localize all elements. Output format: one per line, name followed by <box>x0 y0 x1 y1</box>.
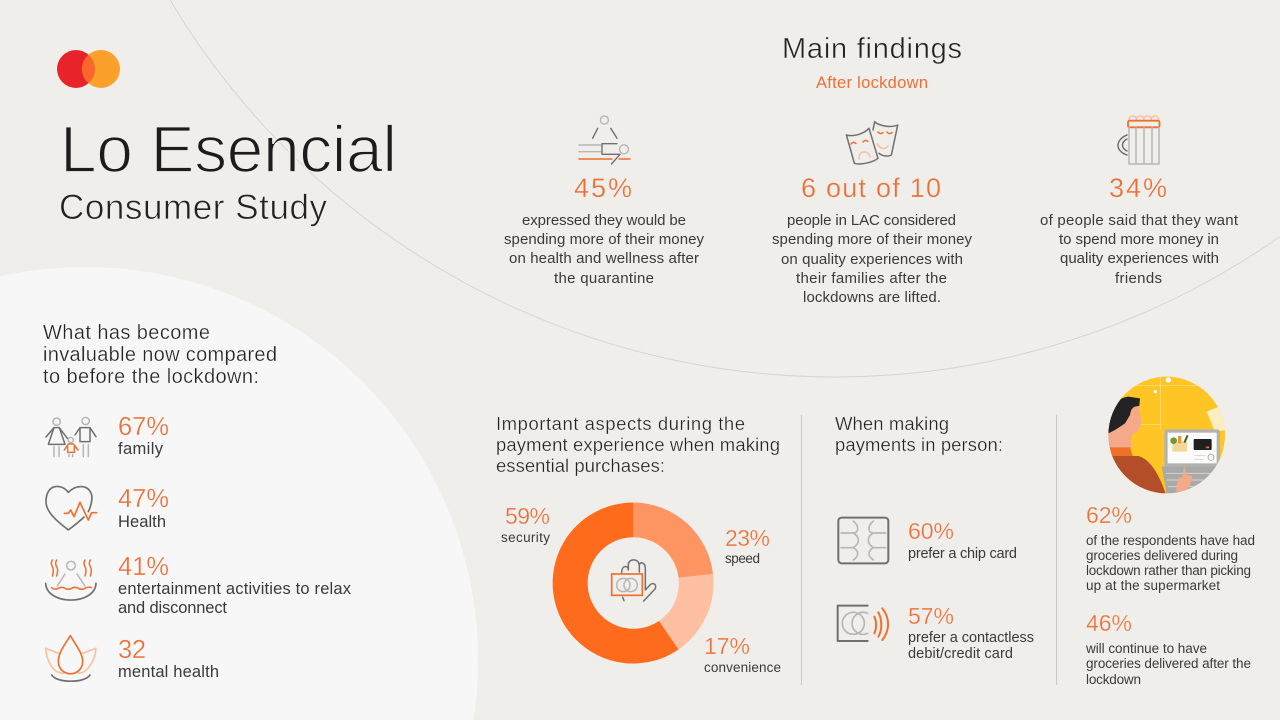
text: friends finding: quality experiences with <box>1060 250 1219 267</box>
label: entertainment: entertainment activities to relax <box>118 580 352 598</box>
heading: payment experience: payment experience when making <box>496 434 780 455</box>
stat: 62% groceries <box>1086 502 1255 593</box>
label: speed <box>725 525 770 566</box>
text: friends finding: to spend more money in <box>1059 231 1219 248</box>
heading: invaluable: What has become <box>43 322 210 344</box>
stat: 62% groceries: 62% <box>1086 502 1132 528</box>
stat: 34%: 34% <box>1109 173 1167 203</box>
panel: main findings heading: Main findings <box>782 33 962 65</box>
heading: payment experience: essential purchases: <box>496 455 665 476</box>
title: Lo Esencial <box>60 112 397 186</box>
text: health finding: the quarantine <box>554 270 654 287</box>
icon: contactless card <box>838 606 888 641</box>
text: health finding: spending more of their money <box>504 231 704 248</box>
icon: chip card <box>838 518 888 563</box>
label: security: security <box>501 530 550 545</box>
panel: finding family experiences <box>772 122 972 306</box>
stat: 46% groceries: will continue to have <box>1085 641 1207 656</box>
stat: 46% groceries <box>1085 610 1251 687</box>
stat: 67%: 67% <box>118 413 169 441</box>
stat: 62% groceries: up at the supermarket <box>1086 578 1220 593</box>
label: family: family <box>118 440 164 458</box>
label: health: Health <box>118 513 166 531</box>
background light circle <box>0 267 478 720</box>
label: security <box>501 503 550 545</box>
heading: payments in person: When making <box>835 413 949 434</box>
icon: person meditating <box>579 116 630 164</box>
label: convenience: 17% <box>704 633 750 659</box>
icon: relaxing in bath <box>46 560 96 600</box>
heading: payment experience <box>496 413 780 476</box>
panel: finding health and wellness <box>504 116 704 287</box>
text: health finding <box>504 212 704 287</box>
stat: chip card: 60% <box>908 518 954 544</box>
stat: 45%: 45% <box>574 173 632 203</box>
stat: 46% groceries: 46% <box>1086 610 1132 636</box>
icon: heart <box>46 486 97 530</box>
heading: payments in person: payments in person: <box>835 434 1003 455</box>
item: health <box>46 485 169 531</box>
label: entertainment: and disconnect <box>118 599 227 617</box>
stat: contactless card <box>908 603 1034 662</box>
label: mental health: mental health <box>118 663 219 681</box>
stat: chip card <box>908 518 1017 562</box>
heading: invaluable <box>43 322 277 388</box>
label: speed: 23% <box>725 525 770 551</box>
text: health finding: on health and wellness after <box>509 250 699 267</box>
stat: 6 out of 10: 6 out of 10 <box>801 173 941 203</box>
logo <box>57 50 120 88</box>
stat: 46% groceries: groceries delivered after the <box>1086 656 1251 671</box>
panel: main findings heading <box>782 33 962 92</box>
title <box>59 112 397 227</box>
donut chart <box>553 502 714 663</box>
panel: what has become invaluable <box>43 322 352 681</box>
stat: contactless card: prefer a contactless <box>908 630 1034 646</box>
panel: groceries delivered <box>1085 373 1255 687</box>
label: entertainment <box>118 580 352 617</box>
icon: hand holding card <box>612 560 656 601</box>
stat: contactless card: 57% <box>908 603 954 629</box>
panel: finding friends experiences <box>1040 116 1239 287</box>
text: family finding: on quality experiences with <box>781 251 963 268</box>
heading: payments in person <box>835 413 1003 455</box>
stat: 32: 32 <box>118 636 146 664</box>
text: family finding: lockdowns are lifted. <box>803 289 941 306</box>
heading: invaluable: to before the lockdown: <box>43 366 259 388</box>
icon: lotus drop <box>46 636 96 681</box>
stat: 62% groceries: groceries delivered during <box>1086 548 1238 563</box>
item: entertainment <box>46 553 352 617</box>
heading: invaluable: invaluable now compared <box>43 344 277 366</box>
label: security: 59% <box>505 503 550 529</box>
text: friends finding: friends <box>1115 270 1162 287</box>
text: family finding: spending more of their money <box>772 231 972 248</box>
text: friends finding <box>1040 212 1239 287</box>
panel: payments in person <box>835 413 1034 662</box>
text: family finding: people in LAC considered <box>787 212 956 229</box>
stat: contactless card: debit/credit card <box>908 646 1013 662</box>
stat: 41%: 41% <box>118 553 169 581</box>
stat: 47%: 47% <box>118 485 169 513</box>
illustration: person shopping on laptop <box>1105 373 1228 497</box>
text: family finding <box>772 212 972 306</box>
panel: payment experience <box>496 413 781 675</box>
text: health finding: expressed they would be <box>522 212 686 229</box>
heading: payment experience: Important aspects during the <box>496 413 745 434</box>
label: convenience: convenience <box>704 660 781 675</box>
stat: 62% groceries: of the respondents have had <box>1086 533 1255 548</box>
item: mental health <box>46 636 219 681</box>
label: speed: speed <box>725 551 760 566</box>
background thin arc <box>170 0 1280 377</box>
panel: main findings heading: After lockdown <box>816 74 928 92</box>
title: Consumer Study <box>59 188 328 227</box>
icon: family <box>46 417 96 457</box>
stat: chip card: prefer a chip card <box>908 546 1017 562</box>
item: family <box>46 413 169 458</box>
stat: 46% groceries: lockdown <box>1086 672 1141 687</box>
label: convenience <box>704 633 781 675</box>
stat: 62% groceries: lockdown rather than picking <box>1086 563 1251 578</box>
icon: beer mug <box>1118 116 1160 164</box>
text: family finding: their families after the <box>796 270 947 287</box>
text: friends finding: of people said that they want <box>1040 212 1239 229</box>
icon: theatre masks <box>846 122 898 164</box>
